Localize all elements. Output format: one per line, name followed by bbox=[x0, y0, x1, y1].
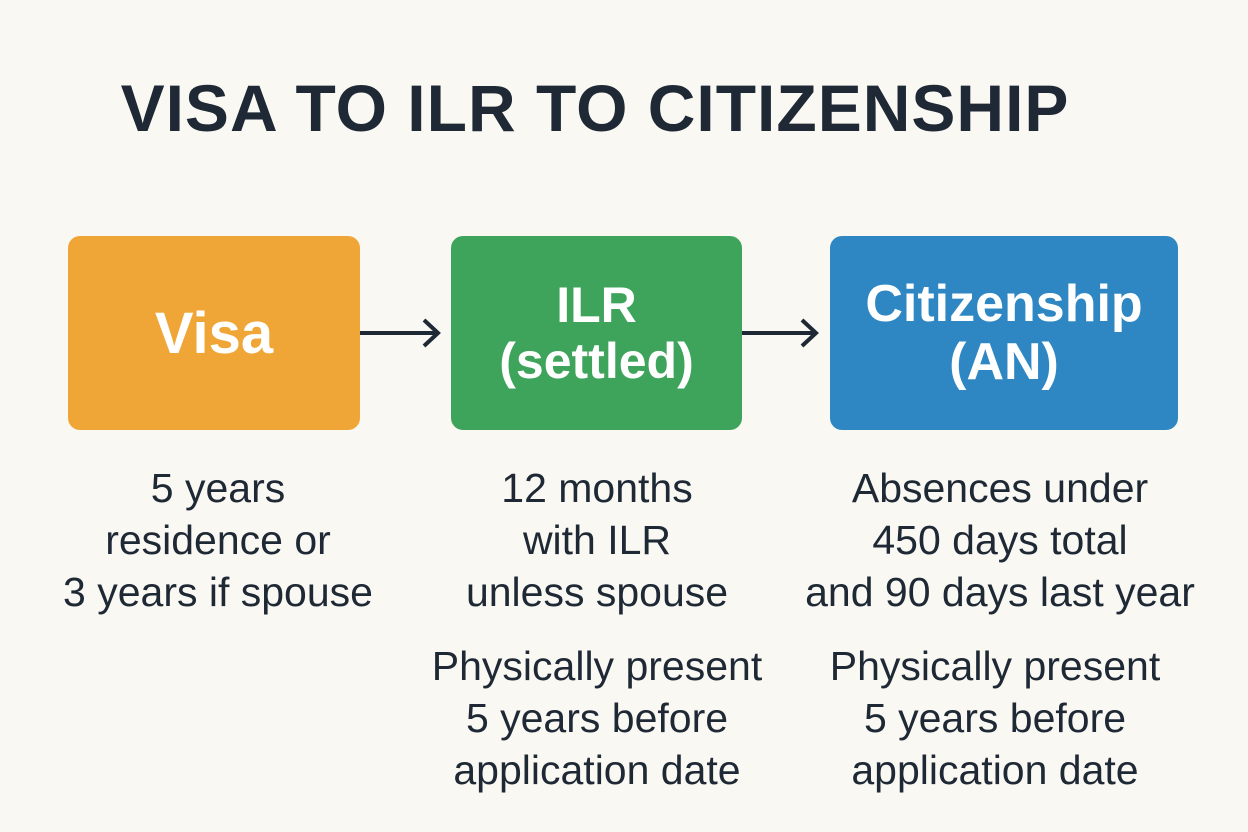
text: ilr physical presence: 5 years before bbox=[466, 695, 728, 741]
arrow: ilr to citizenship bbox=[742, 318, 819, 348]
text: visa requirement: residence or bbox=[105, 517, 331, 563]
text: citizenship physical presence: application date bbox=[851, 747, 1139, 793]
box: citizenship bbox=[830, 236, 1178, 430]
text: visa requirement: 5 years bbox=[151, 465, 285, 511]
text: ilr requirement bbox=[466, 465, 728, 615]
text: visa requirement: 3 years if spouse bbox=[63, 569, 373, 615]
text: ilr physical presence: Physically present bbox=[432, 643, 762, 689]
arrow: visa to ilr bbox=[360, 318, 441, 348]
text: citizenship absences: Absences under bbox=[852, 465, 1148, 511]
text: ilr requirement: 12 months bbox=[501, 465, 693, 511]
text: visa requirement bbox=[63, 465, 373, 615]
text: ilr physical presence bbox=[432, 643, 762, 793]
box: citizenship: Citizenship bbox=[865, 275, 1143, 333]
box: visa bbox=[68, 236, 360, 430]
text: ilr requirement: unless spouse bbox=[466, 569, 728, 615]
text: citizenship physical presence bbox=[830, 643, 1160, 793]
box: citizenship: (AN) bbox=[949, 333, 1059, 391]
title: VISA TO ILR TO CITIZENSHIP bbox=[121, 71, 1069, 145]
text: citizenship absences bbox=[805, 465, 1195, 615]
text: ilr requirement: with ILR bbox=[523, 517, 671, 563]
text: citizenship absences: and 90 days last year bbox=[805, 569, 1195, 615]
box: visa: Visa bbox=[155, 300, 273, 366]
text: ilr physical presence: application date bbox=[453, 747, 741, 793]
box: ilr: (settled) bbox=[499, 333, 694, 389]
box: ilr bbox=[451, 236, 742, 430]
text: citizenship physical presence: 5 years before bbox=[864, 695, 1126, 741]
text: citizenship absences: 450 days total bbox=[872, 517, 1128, 563]
box: ilr: ILR bbox=[556, 277, 637, 333]
text: citizenship physical presence: Physically present bbox=[830, 643, 1160, 689]
